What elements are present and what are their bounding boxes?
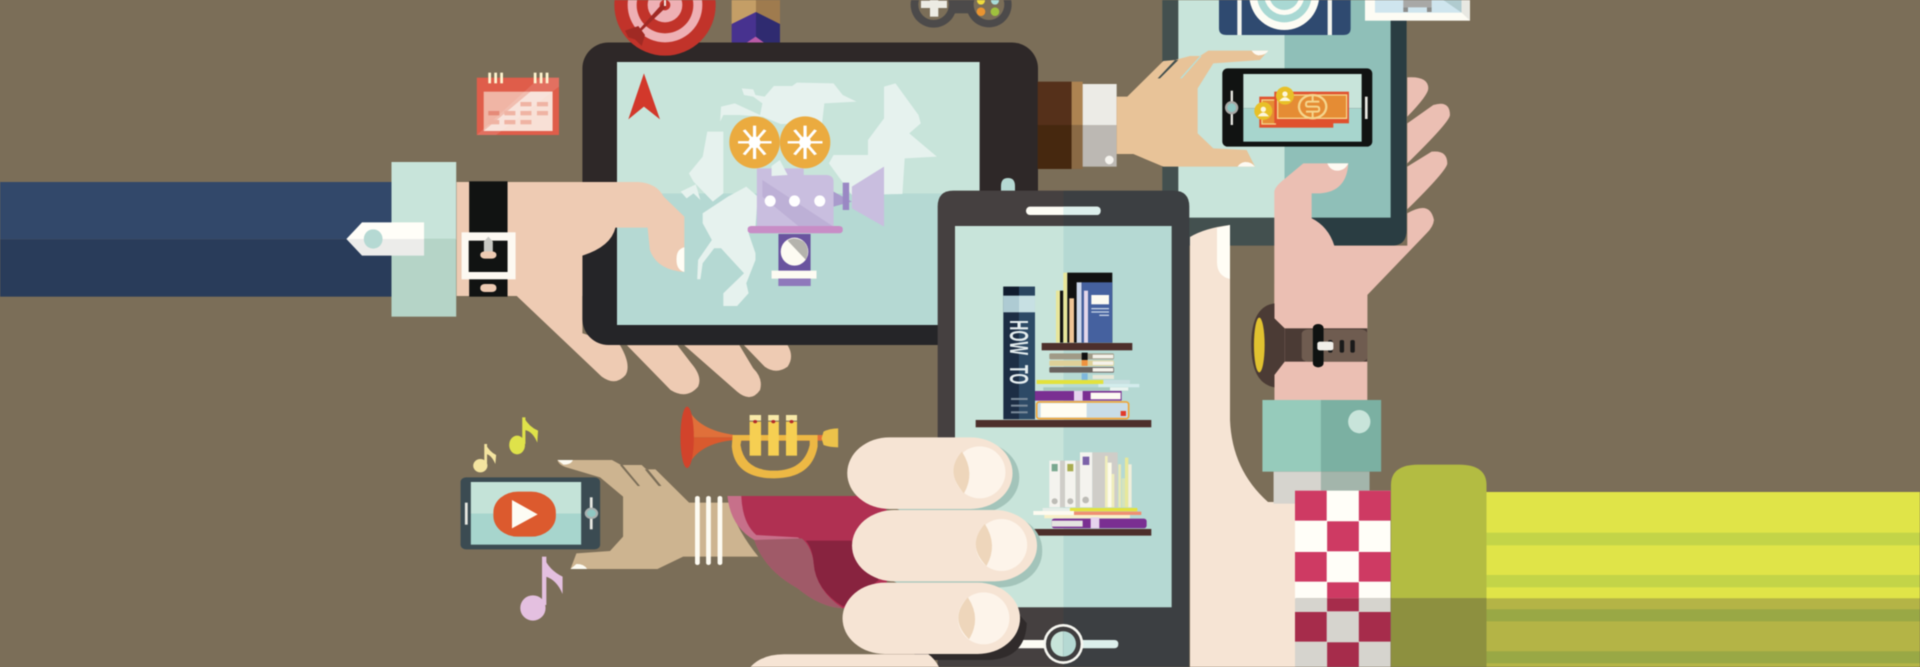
tablet screen <box>617 62 980 325</box>
small hand with video phone <box>461 460 887 608</box>
note lime <box>509 417 538 454</box>
wristwatch <box>1251 303 1367 387</box>
left arm: sleeve, cuff, watch and hand <box>0 162 456 317</box>
icon: calendar <box>477 73 559 135</box>
cuff tag with button <box>346 222 424 256</box>
phone screen <box>1243 74 1362 142</box>
thumbnail <box>676 247 684 272</box>
book: How To: TO <box>1004 365 1034 384</box>
crimson sleeve <box>727 496 887 608</box>
upper books <box>1056 273 1112 343</box>
bracelets <box>695 496 722 565</box>
wristwatch: black strap <box>462 181 516 297</box>
panel: main phone with bookshelf <box>938 191 1189 667</box>
tablet screen <box>1178 0 1391 218</box>
finger shadows <box>875 442 1042 587</box>
stacked books <box>1035 353 1139 419</box>
icon: picture frame <box>1365 0 1470 21</box>
middle finger <box>852 510 1037 581</box>
tablet side button <box>1001 178 1015 192</box>
thumbnail <box>1327 163 1348 171</box>
panel: back tablet with pink hand <box>1162 0 1470 330</box>
speaker <box>1026 207 1101 215</box>
fingers behind tablet <box>1407 77 1450 209</box>
book: How To <box>1003 287 1035 419</box>
ring finger <box>843 583 1020 654</box>
grey band <box>1274 472 1370 504</box>
map on tablet <box>681 83 937 306</box>
phone body <box>938 191 1189 667</box>
tablet body <box>1162 0 1407 246</box>
lower shelf books <box>1033 452 1147 528</box>
home button <box>1009 624 1118 664</box>
big hand: four fingers over phone <box>750 437 1042 667</box>
checkered shirt cuff <box>1295 491 1391 667</box>
right arm: wrist, watch, cuffs and sleeve <box>1251 283 1920 667</box>
icon: north arrow <box>628 73 660 119</box>
big hand: palm and thumb on right of phone <box>1190 225 1296 667</box>
green cuff <box>1391 465 1487 667</box>
left hand: palm and thumb <box>457 182 684 296</box>
icon: camera <box>1219 0 1351 35</box>
panel: tablet with map <box>582 42 1038 345</box>
navy sleeve <box>0 182 393 297</box>
icon: trumpet <box>680 407 838 478</box>
sleeve <box>1038 82 1117 169</box>
green striped sleeve <box>1487 492 1920 667</box>
icon: music notes <box>473 417 563 621</box>
book: How To: HOW <box>1004 320 1034 355</box>
note pink <box>520 557 563 621</box>
black phone <box>1222 68 1372 147</box>
hand <box>1117 51 1268 167</box>
icon: pencil <box>732 0 780 43</box>
pink palm and thumb <box>1274 163 1434 330</box>
note small yellow <box>473 444 496 472</box>
index finger <box>847 437 1013 509</box>
icon: film projector <box>729 116 884 286</box>
phone screen <box>955 226 1172 607</box>
little finger <box>750 654 939 667</box>
forearm and hand <box>557 460 758 569</box>
pink forearm <box>1274 283 1367 401</box>
teal cuff <box>1262 400 1381 472</box>
thumbnail <box>1217 225 1230 279</box>
phone with play button <box>461 477 600 549</box>
left hand: fingers behind tablet <box>517 296 791 397</box>
icon: game controller <box>911 0 1012 28</box>
icon: banknotes and coins <box>1254 87 1349 128</box>
bookshelves <box>976 343 1151 536</box>
shirt cuff <box>391 162 456 317</box>
icon: target with dart <box>614 0 716 56</box>
phone controls <box>1225 91 1368 125</box>
brown sleeved hand with phone <box>1038 51 1372 169</box>
